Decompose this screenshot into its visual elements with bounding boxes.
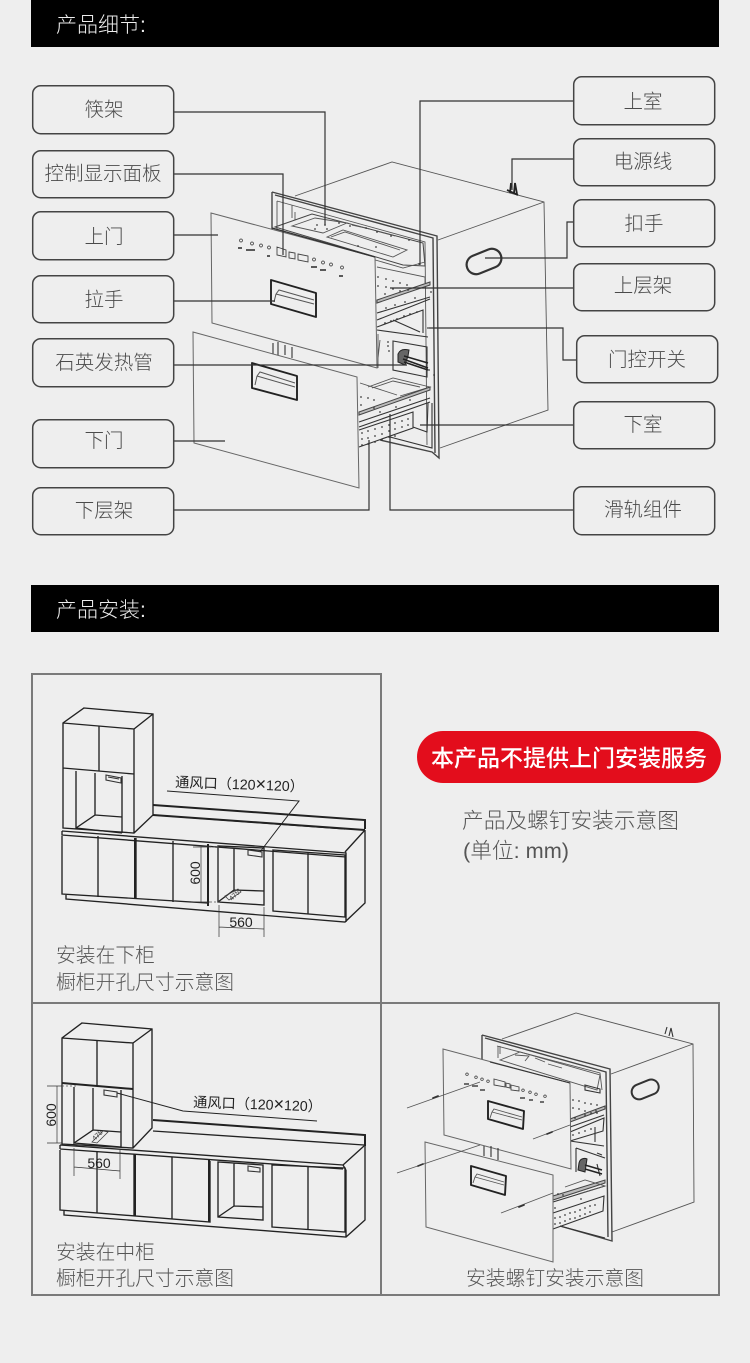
caption: 安装在下柜 [56, 945, 155, 967]
label: 扣手 [574, 200, 715, 247]
heading bar: 产品安装 [31, 585, 719, 632]
dimension 600: 600 [187, 861, 203, 885]
callout leader lines [174, 101, 576, 510]
panel frames [32, 674, 719, 1295]
upper shelf rails and perforation [377, 267, 430, 337]
screw arrows [397, 1082, 570, 1213]
heading bar: 产品安装: 产品安装: [56, 599, 146, 622]
label: 拉手 [33, 276, 174, 323]
diagram: kitchen with lower cabinet opening [62, 708, 365, 937]
label: 控制显示面板: 控制显示面板 [44, 163, 162, 185]
label: 下门: 下门 [84, 430, 124, 452]
callout labels, left column [33, 86, 174, 535]
label: 上层架: 上层架 [614, 275, 672, 297]
panel: screw installation [397, 1013, 694, 1290]
label: 上室: 上室 [623, 91, 663, 113]
label: 控制显示面板 [33, 151, 174, 198]
label: 上门 [33, 212, 174, 260]
label: 上层架 [574, 264, 715, 311]
label: 电源线 [574, 139, 715, 186]
panel: install in middle cabinet [43, 1023, 365, 1290]
vent label: 通风口（120×120） [193, 1091, 322, 1115]
cabinet body [295, 162, 548, 448]
diagram: kitchen with tall cabinet opening [47, 1023, 365, 1237]
diagram: screw mounting on drawer unit [425, 1013, 694, 1262]
caption: 橱柜开孔尺寸示意图 [56, 972, 234, 994]
caption: 安装螺钉安装示意图 [466, 1268, 644, 1290]
upper door handle [271, 280, 316, 317]
connector between doors [273, 342, 292, 358]
lower shelf rails and perforation [359, 378, 432, 448]
heading bar: 产品细节: 产品细节: [56, 14, 146, 37]
lower door handle [252, 363, 297, 400]
vent label: 通风口（120×120） [175, 771, 304, 795]
callout: no door-to-door installation [417, 731, 721, 783]
panel: install in lower cabinet [56, 708, 365, 994]
product diagram: exploded drawer unit [193, 162, 548, 488]
callout labels, right column [574, 77, 718, 535]
label: 下门 [33, 420, 174, 468]
label: 下室 [574, 402, 715, 449]
side handle slot [464, 246, 504, 277]
label: 下层架 [33, 488, 174, 535]
label: 上室 [574, 77, 715, 125]
label: 电源线: 电源线 [614, 151, 672, 173]
label: 石英发热管 [33, 339, 174, 387]
caption: 安装在中柜 [56, 1242, 155, 1264]
panel: red notice and screw note [417, 731, 721, 863]
power cord plug [507, 183, 518, 195]
upper door panel [211, 213, 377, 368]
door control panel [277, 247, 308, 262]
label: 门控开关 [577, 336, 718, 383]
label: 扣手: 扣手 [624, 213, 664, 235]
dimension 475: 475 [91, 1129, 105, 1143]
dimension 560: 560 [229, 914, 253, 930]
chopstick rack [275, 214, 425, 268]
label: 拉手: 拉手 [84, 289, 124, 311]
note text: 产品及螺钉安装示意图 [462, 808, 679, 833]
label: 上门: 上门 [84, 226, 124, 248]
quartz heating tube [378, 292, 434, 377]
label: 石英发热管: 石英发热管 [55, 352, 153, 374]
label: 滑轨组件 [574, 487, 715, 535]
label: 门控开关: 门控开关 [608, 349, 686, 371]
dimension 560: 560 [87, 1155, 111, 1171]
label: 下层架: 下层架 [75, 500, 133, 522]
heading bar: 产品细节 [31, 0, 719, 47]
label: 筷架: 筷架 [84, 99, 124, 121]
label: 滑轨组件: 滑轨组件 [604, 499, 682, 521]
dimension 475: 475 [228, 889, 242, 903]
dimension 600: 600 [43, 1103, 59, 1127]
label: 筷架 [33, 86, 174, 134]
front frame [272, 192, 439, 458]
caption: 橱柜开孔尺寸示意图 [56, 1268, 234, 1290]
callout: no door-to-door installation: 本产品不提供上门安装服务 [431, 745, 707, 771]
note text: (单位: mm) [463, 838, 569, 863]
lower door panel [193, 332, 359, 488]
label: 下室: 下室 [623, 414, 663, 436]
